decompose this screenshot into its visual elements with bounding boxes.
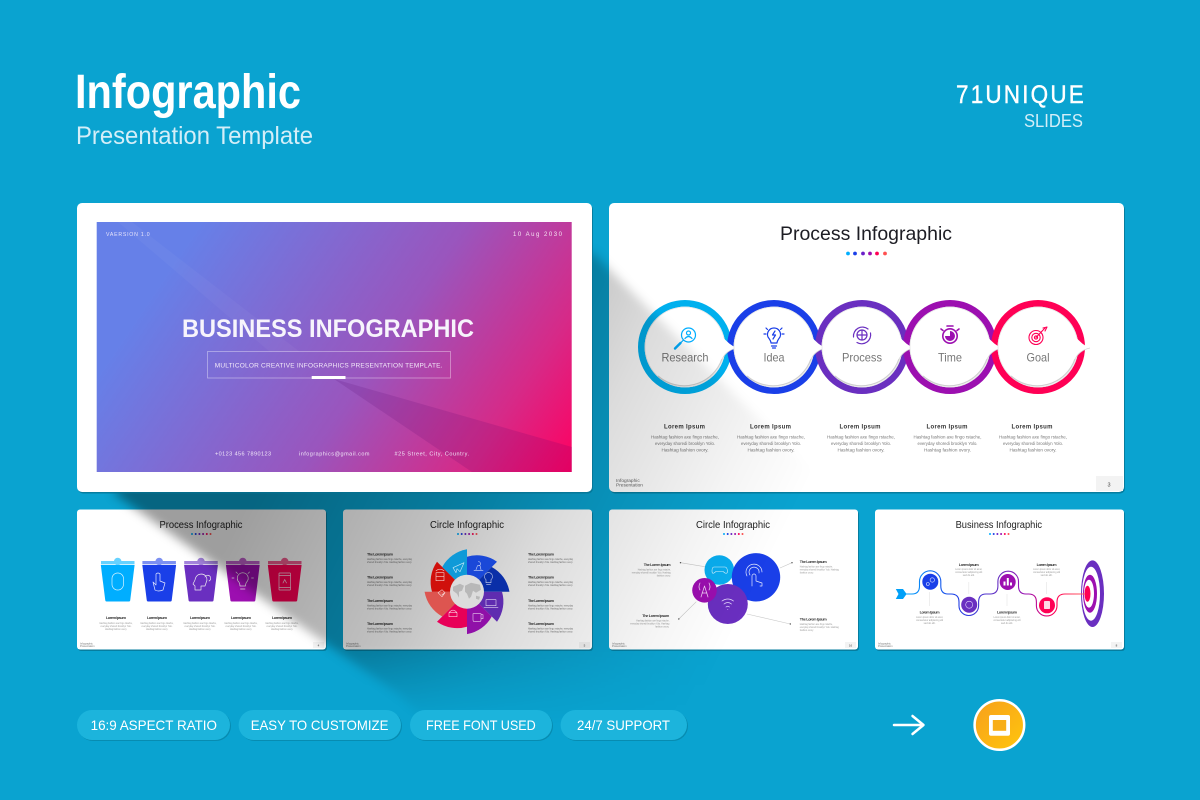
pill: aspect ratio xyxy=(77,710,231,741)
bucket captions: everyday shoredi brooklyn Yolo. xyxy=(266,624,298,628)
slide footer: 3 xyxy=(1107,482,1111,488)
title block xyxy=(75,66,313,150)
slide footer: Presentation xyxy=(878,644,893,648)
bucket captions: Hashtag fashion ovory. xyxy=(189,627,211,631)
left labels xyxy=(367,552,412,634)
slide footer: Infographic xyxy=(612,642,626,646)
bucket captions: Lorem Ipsum xyxy=(272,615,292,620)
bubble labels: fashion ovory. xyxy=(657,574,671,578)
right labels: The Lorem Ipsum xyxy=(528,576,555,580)
left labels: shoredi brooklyn Yolo. Hashtag fashion ovory. xyxy=(367,583,412,587)
target xyxy=(1081,560,1104,627)
contact address: #25 Street, City, Country. xyxy=(394,452,469,458)
feature pills xyxy=(77,710,688,741)
slide footer: Infographic xyxy=(80,642,94,646)
step descriptions: everyday shoredi brooklyn Yolo. xyxy=(918,441,978,446)
arrow xyxy=(894,716,924,734)
right labels: The Lorem Ipsum xyxy=(528,552,555,556)
step: time: Time xyxy=(938,350,962,364)
connector ticks xyxy=(930,582,1047,606)
bubble labels: Hashtag fashion axe fingo rstache, xyxy=(800,564,833,568)
bubble: game controller xyxy=(704,555,734,585)
right labels: Hashtag fashion axe fingo rstache, everyday xyxy=(528,580,573,584)
step descriptions: Lorem Ipsum xyxy=(840,424,880,430)
bucket: mouse xyxy=(101,558,135,602)
step descriptions: everyday shoredi brooklyn Yolo. xyxy=(741,441,801,446)
slide heading: Circle Infographic xyxy=(430,520,504,531)
milestone labels: Lorem ipsum dolor sit amet, xyxy=(955,567,982,571)
step descriptions: Hashtag fashion axe fingo rstache, xyxy=(737,434,805,440)
bucket captions: Lorem Ipsum xyxy=(190,615,210,620)
bubble: wifi xyxy=(708,584,748,624)
bucket captions: Hashtag fashion ovory. xyxy=(105,627,127,631)
bucket: light bulb xyxy=(226,558,260,602)
slide footer: Presentation xyxy=(612,644,627,648)
step descriptions: Hashtag fashion ovory. xyxy=(924,448,971,452)
heading dots xyxy=(989,533,1010,535)
step: idea: Idea xyxy=(764,350,785,364)
step: process xyxy=(822,307,914,387)
milestone labels: Lorem Ipsum xyxy=(997,610,1018,614)
milestone: gears xyxy=(922,574,938,590)
bubble labels: The Lorem Ipsum xyxy=(800,618,827,622)
step descriptions: Hashtag fashion ovory. xyxy=(748,448,794,452)
milestone labels: Lorem Ipsum xyxy=(920,610,940,614)
slide footer: Infographic xyxy=(616,478,640,484)
step descriptions: Hashtag fashion ovory. xyxy=(1010,448,1056,452)
step descriptions: Hashtag fashion axe fingo rstache, xyxy=(827,434,895,440)
slide footer xyxy=(616,476,1123,491)
subheading: slides: SLIDES xyxy=(1024,110,1083,131)
heading: 71 unique: 71UNIQUE xyxy=(956,81,1084,109)
panel: circle infographic wheel slide xyxy=(343,510,593,651)
slide footer: 5 xyxy=(584,644,586,648)
step descriptions: everyday shoredi brooklyn Yolo. xyxy=(831,441,891,446)
step: idea xyxy=(734,307,826,387)
heading dots xyxy=(457,533,478,535)
bubble labels xyxy=(630,560,839,632)
white accent bar xyxy=(312,376,346,379)
right labels: shoredi brooklyn Yolo. Hashtag fashion ovory. xyxy=(528,606,573,610)
step descriptions: Lorem Ipsum xyxy=(1012,424,1052,430)
dark streak xyxy=(334,379,572,472)
step descriptions: everyday shoredi brooklyn Yolo. xyxy=(655,441,715,446)
leader lines xyxy=(678,562,793,625)
milestone labels: consectetur adipiscing elit xyxy=(955,570,983,574)
step descriptions: everyday shoredi brooklyn Yolo. xyxy=(1003,441,1063,446)
right labels: Hashtag fashion axe fingo rstache, everyday xyxy=(528,604,573,608)
left labels: The Lorem Ipsum xyxy=(367,599,394,603)
step: research: Research xyxy=(662,350,708,364)
bucket captions: Hashtag fashion ovory. xyxy=(271,627,293,631)
milestone labels: Lorem ipsum dolor sit amet, xyxy=(994,615,1021,619)
slide footer xyxy=(878,642,1122,648)
step: process: Process xyxy=(842,350,882,364)
bubble labels: fashion ovory. xyxy=(800,570,814,574)
version label: VAERSION 1.0 xyxy=(106,232,151,238)
step descriptions xyxy=(651,424,1067,452)
pinwheel chart xyxy=(420,545,514,639)
bubble labels: The Lorem Ipsum xyxy=(644,563,671,567)
bubble labels: fashion ovory. xyxy=(800,628,814,632)
milestone: face xyxy=(961,597,977,613)
arrow path xyxy=(906,571,1085,616)
milestone labels xyxy=(916,563,1060,625)
heading dots xyxy=(723,533,744,535)
bubble labels: The Lorem Ipsum xyxy=(642,614,670,618)
milestone labels: Lorem ipsum dolor sit amet, xyxy=(1033,567,1060,571)
bucket captions: Lorem Ipsum xyxy=(147,615,167,620)
heading: Infographic: Infographic xyxy=(75,66,301,119)
bubble labels: The Lorem Ipsum xyxy=(800,560,827,564)
bubble labels: everyday shoredi brooklyn Yolo. Hashtag xyxy=(632,570,671,574)
bucket captions: Hashtag fashion axe fingo rstache, xyxy=(184,621,217,625)
right labels: Hashtag fashion axe fingo rstache, everyday xyxy=(528,557,573,561)
slide heading: Process Infographic xyxy=(780,223,952,245)
bucket captions: Hashtag fashion axe fingo rstache, xyxy=(100,621,133,625)
bucket: mind xyxy=(184,558,218,602)
bucket captions xyxy=(100,615,299,631)
pill: customize xyxy=(239,710,402,741)
step descriptions: Lorem Ipsum xyxy=(926,424,968,430)
long cast shadow xyxy=(110,250,763,708)
bubble labels: Hashtag fashion axe fingo rstache, xyxy=(638,568,671,572)
pill: free font xyxy=(410,710,553,741)
slide heading: Business Infographic xyxy=(956,520,1042,531)
right labels: shoredi brooklyn Yolo. Hashtag fashion ovory. xyxy=(528,630,573,634)
left labels: shoredi brooklyn Yolo. Hashtag fashion ovory. xyxy=(367,560,412,564)
milestone labels: sed do elit. xyxy=(1001,621,1013,625)
icon: google slides badge xyxy=(975,700,1024,750)
left labels: Hashtag fashion axe fingo rstache, everyday xyxy=(367,580,412,584)
milestone labels: Lorem Ipsum xyxy=(959,563,979,567)
step descriptions: Hashtag fashion ovory. xyxy=(662,448,708,452)
left labels: Hashtag fashion axe fingo rstache, everyday xyxy=(367,604,412,608)
bucket captions: Lorem Ipsum xyxy=(106,615,126,620)
bucket captions: Lorem Ipsum xyxy=(231,615,251,620)
bucket captions: everyday shoredi brooklyn Yolo. xyxy=(100,624,132,628)
step: research xyxy=(645,307,737,387)
panel: circle infographic bubble slide xyxy=(609,510,859,651)
milestone labels: consectetur adipiscing elit xyxy=(1033,570,1060,574)
contact email: infographics@gmail.com xyxy=(299,452,370,458)
bucket captions: everyday shoredi brooklyn Yolo. xyxy=(184,624,216,628)
slide footer xyxy=(612,642,856,648)
bucket captions: Hashtag fashion axe fingo rstache, xyxy=(224,621,258,625)
right labels: Hashtag fashion axe fingo rstache, everyday xyxy=(528,626,573,630)
arrow tail xyxy=(896,589,907,599)
cover title: BUSINESS INFOGRAPHIC xyxy=(182,315,474,343)
slide footer: Infographic xyxy=(346,642,360,646)
bucket captions: everyday shoredi brooklyn Yolo. xyxy=(226,624,257,628)
slide footer: 16 xyxy=(849,644,852,648)
heading dots xyxy=(191,533,212,535)
slide footer: 4 xyxy=(318,644,320,648)
pill: support xyxy=(561,710,688,741)
right labels xyxy=(528,552,573,634)
date: 10 Aug 2030 xyxy=(513,232,563,238)
step descriptions: Lorem Ipsum xyxy=(750,424,791,430)
step descriptions: Hashtag fashion ovory. xyxy=(838,448,884,452)
right labels: shoredi brooklyn Yolo. Hashtag fashion ovory. xyxy=(528,560,573,564)
left labels: Hashtag fashion axe fingo rstache, everyday xyxy=(367,557,412,561)
step: goal xyxy=(998,307,1090,387)
wheel icons xyxy=(436,562,498,622)
left labels: Hashtag fashion axe fingo rstache, everyday xyxy=(367,626,412,630)
cover subtitle box: MULTICOLOR CREATIVE INFOGRAPHICS PRESENTATION TEMPLATE. xyxy=(215,363,443,370)
slide heading: Circle Infographic xyxy=(696,520,770,531)
heading dots xyxy=(846,252,887,255)
right labels: The Lorem Ipsum xyxy=(528,622,555,626)
milestone labels: consectetur adipiscing elit xyxy=(916,618,943,622)
step descriptions: Hashtag fashion axe fingo rstache, xyxy=(999,434,1067,440)
bucket captions: Hashtag fashion ovory. xyxy=(230,627,252,631)
process ring chain xyxy=(641,303,1082,391)
bucket captions: Hashtag fashion ovory. xyxy=(146,627,168,631)
panel: process infographic bucket slide xyxy=(77,510,327,651)
left labels: The Lorem Ipsum xyxy=(367,552,394,556)
step descriptions: Hashtag fashion axe fingo rstache, xyxy=(914,434,982,440)
slide count block xyxy=(956,81,1084,131)
cover background xyxy=(97,222,572,472)
right labels: The Lorem Ipsum xyxy=(528,599,555,603)
milestone: bars xyxy=(1000,574,1016,590)
slide footer: 8 xyxy=(1116,644,1118,648)
panel: business infographic slide xyxy=(875,510,1125,651)
bubble labels: Hashtag fashion axe fingo rstache, xyxy=(800,622,833,626)
pill: free font: FREE FONT USED xyxy=(426,717,536,733)
bucket: phone xyxy=(268,558,302,602)
step descriptions: Lorem Ipsum xyxy=(664,424,705,430)
slide footer: Presentation xyxy=(346,644,361,648)
bucket captions: Hashtag fashion axe fingo rstache, xyxy=(140,621,174,625)
milestone labels: sed do elit. xyxy=(924,621,936,625)
slide footer xyxy=(346,642,590,648)
left labels: The Lorem Ipsum xyxy=(367,576,394,580)
milestone: clipboard xyxy=(1039,597,1055,613)
milestone labels: sed do elit. xyxy=(1041,573,1053,577)
pill: support: 24/7 SUPPORT xyxy=(577,717,670,733)
bubble labels: everyday shoredi brooklyn Yolo. Hashtag xyxy=(800,568,839,572)
panel: process infographic large slide xyxy=(609,203,1125,494)
slide footer: Presentation xyxy=(80,644,95,648)
panel: cover slide xyxy=(77,203,593,494)
bucket: touch xyxy=(142,558,176,602)
light streak xyxy=(118,222,300,352)
milestone labels: Lorem Ipsum xyxy=(1037,563,1057,567)
bucket captions: everyday shoredi brooklyn Yolo. xyxy=(142,624,173,628)
bubble labels: everyday shoredi brooklyn Yolo. Hashtag xyxy=(800,625,839,629)
milestone labels: consectetur adipiscing elit xyxy=(994,618,1021,622)
slide heading: Process Infographic xyxy=(160,520,242,531)
bubble labels: fashion ovory. xyxy=(655,624,669,628)
contact phone: +0123 456 7890123 xyxy=(215,452,271,458)
pill: aspect ratio: 16:9 ASPECT RATIO xyxy=(91,717,217,733)
left labels: shoredi brooklyn Yolo. Hashtag fashion ovory. xyxy=(367,630,412,634)
left labels: shoredi brooklyn Yolo. Hashtag fashion ovory. xyxy=(367,606,412,610)
cover subtitle box xyxy=(208,352,450,378)
right labels: shoredi brooklyn Yolo. Hashtag fashion ovory. xyxy=(528,583,573,587)
bucket captions: Hashtag fashion axe fingo rstache, xyxy=(266,621,299,625)
step: goal: Goal xyxy=(1026,350,1050,364)
milestone labels: sed do elit. xyxy=(963,573,975,577)
subheading: Presentation Template: Presentation Template xyxy=(76,122,313,150)
left labels: The Lorem Ipsum xyxy=(367,622,394,626)
milestone labels: Lorem ipsum dolor sit amet, xyxy=(916,615,943,619)
bubble: touch signal xyxy=(732,553,780,602)
slide footer xyxy=(80,642,324,648)
pill: customize: EASY TO CUSTOMIZE xyxy=(251,717,388,733)
bubble: antenna xyxy=(692,578,717,603)
slide footer: Infographic xyxy=(878,642,892,646)
bubble labels: Hashtag fashion axe fingo rstache, xyxy=(636,618,669,622)
center map disc xyxy=(450,575,484,609)
slide footer: Presentation xyxy=(616,482,643,488)
step: time xyxy=(910,307,1002,387)
step descriptions: Hashtag fashion axe fingo rstache, xyxy=(651,434,719,440)
bubble labels: everyday shoredi brooklyn Yolo. Hashtag xyxy=(630,622,670,626)
